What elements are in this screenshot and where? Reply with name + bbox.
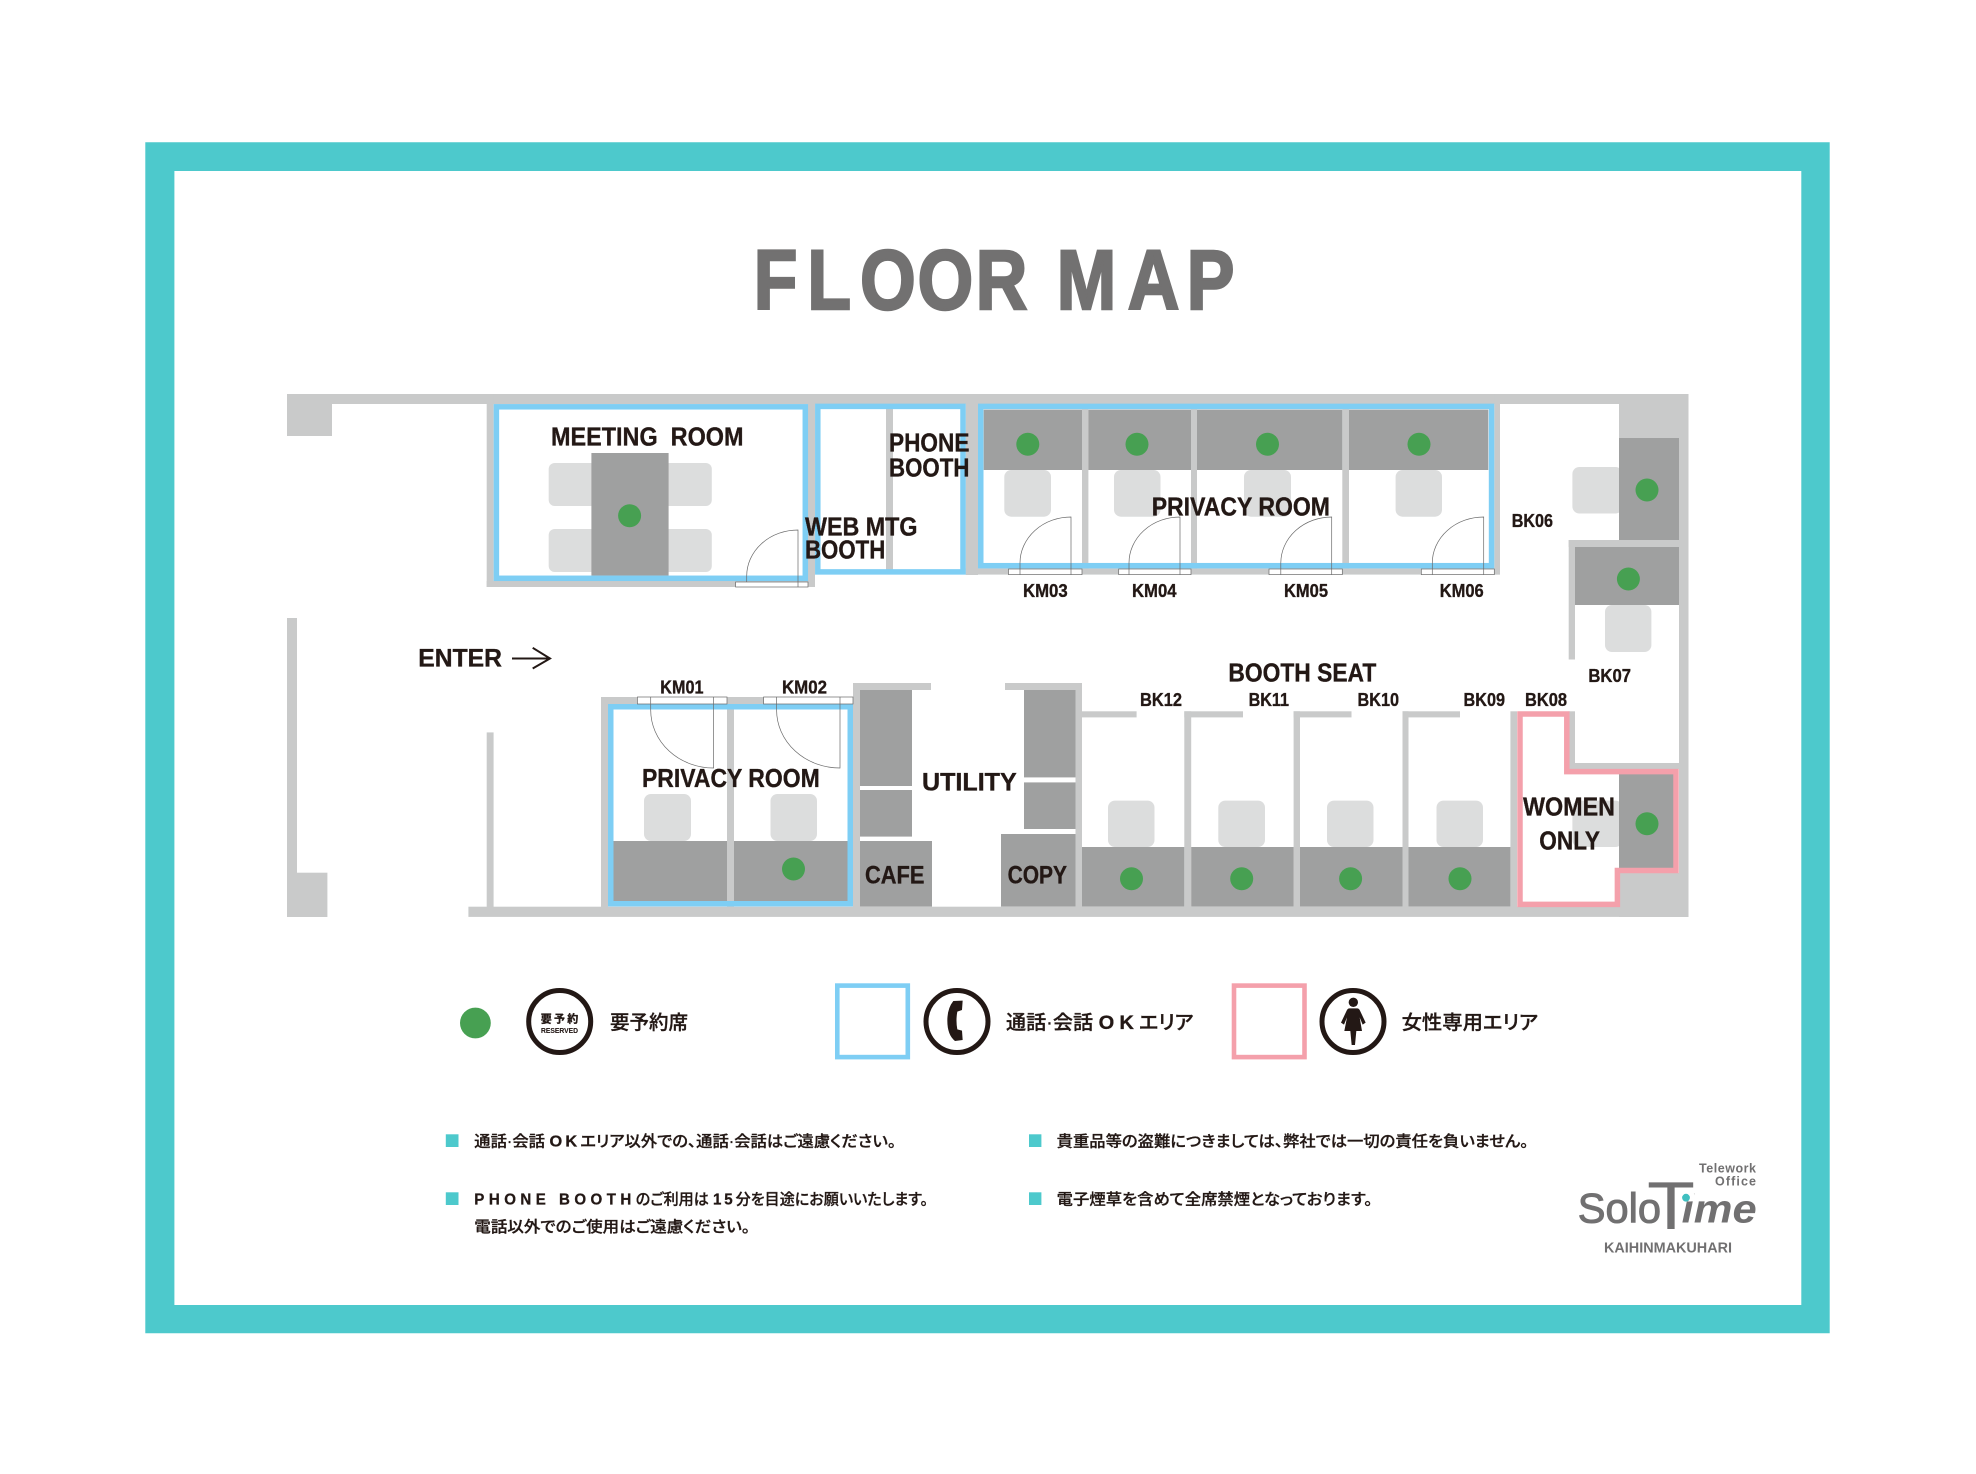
booth seat heading: BOOTH SEAT	[1228, 658, 1376, 688]
reserved dots	[1016, 433, 1430, 456]
seat numbers KM01 and KM02: KM02	[782, 676, 827, 698]
reserved dot	[1636, 812, 1658, 835]
entrance label with arrow: ENTER	[418, 645, 502, 673]
seat numbers BK09 to BK12: BK10	[1358, 689, 1399, 710]
chairs	[644, 794, 817, 841]
floor plan	[287, 394, 1688, 917]
seat numbers KM01 and KM02: KM01	[660, 676, 704, 698]
seat numbers BK09 to BK12: BK09	[1464, 689, 1505, 710]
cafe counter	[860, 841, 932, 907]
seat numbers KM03 to KM06: KM03	[1023, 580, 1068, 601]
copy counter: COPY	[1008, 861, 1067, 889]
legend text: call area: 通話·会話 OKエリア	[1006, 1012, 1194, 1034]
seat number BK08: BK08	[1525, 689, 1567, 710]
legend text: women only area: 女性専用エリア	[1402, 1012, 1538, 1034]
panel: booth seats	[1082, 658, 1510, 907]
meeting room chairs	[549, 463, 712, 572]
logo: Solo	[1578, 1185, 1661, 1232]
chairs	[1004, 470, 1442, 517]
icon: reserved badge: RESERVED	[541, 1028, 578, 1035]
panel: BK06 seat: BK06	[1512, 510, 1553, 531]
seat numbers KM01 and KM02	[660, 676, 827, 698]
legend swatch: call area	[837, 986, 908, 1057]
doors	[1008, 517, 1494, 575]
icon: reserved badge	[529, 990, 591, 1052]
logo: KAIHINMAKUHARI	[1604, 1241, 1732, 1257]
meeting room area outline	[496, 407, 805, 578]
web meeting booth label: WEB MTG	[805, 511, 918, 541]
desks	[984, 410, 1488, 470]
note: phone booth: PHONE BOOTHのご利用は 15分を目途にお願いいたします。	[474, 1190, 928, 1208]
logo: T	[1647, 1168, 1695, 1244]
women only label: WOMEN	[1523, 792, 1615, 822]
utility label: UTILITY	[922, 769, 1017, 797]
booth divider	[886, 404, 893, 570]
desks	[614, 841, 848, 901]
phone booth label: PHONE	[889, 427, 969, 457]
doors	[637, 697, 853, 768]
lower privacy room label: PRIVACY ROOM	[642, 763, 820, 793]
icon: reserved badge: 要予約	[541, 1012, 578, 1026]
desks	[1082, 847, 1510, 907]
note: phone booth: 電話以外でのご使用はご遠慮ください。	[474, 1218, 750, 1236]
logo	[1578, 1162, 1757, 1257]
meeting room door	[736, 530, 808, 587]
logo: ime	[1682, 1188, 1757, 1232]
lower privacy area outline	[611, 707, 850, 904]
phone booth label	[889, 427, 969, 482]
seat numbers BK09 to BK12	[1140, 689, 1505, 710]
seat numbers BK09 to BK12: BK11	[1249, 689, 1289, 710]
note: calls: 通話·会話 OKエリア以外での、通話·会話はご遠慮ください。	[474, 1132, 896, 1150]
women only label: ONLY	[1539, 826, 1600, 856]
women only label	[1523, 792, 1615, 856]
note: smoking: 電子煙草を含めて全席禁煙となっております。	[1057, 1190, 1372, 1208]
chairs	[1108, 801, 1483, 847]
seat numbers KM03 to KM06: KM04	[1132, 580, 1177, 601]
panel: lower privacy rooms	[611, 676, 853, 907]
title: FLOOR MAP	[754, 232, 1234, 327]
panel: BK07 seat: BK07	[1588, 665, 1631, 686]
reserved dot	[618, 504, 641, 527]
phone booth label: BOOTH	[889, 452, 969, 482]
logo: Telework	[1699, 1162, 1756, 1176]
web meeting booth label	[805, 511, 918, 564]
reserved dot	[782, 858, 805, 880]
meeting table	[591, 453, 669, 576]
panel: phone and web meeting booths	[805, 404, 969, 572]
building walls	[287, 394, 1688, 917]
icon: woman	[1322, 990, 1384, 1052]
entrance label with arrow	[418, 645, 550, 673]
copy counter	[1001, 834, 1076, 907]
legend text: reserved seats: 要予約席	[610, 1012, 688, 1034]
seat numbers KM03 to KM06: KM06	[1440, 580, 1484, 601]
seat numbers KM03 to KM06	[1023, 580, 1484, 601]
panel: women only area	[1520, 689, 1676, 904]
note: phone booth	[446, 1190, 928, 1236]
logo: Office	[1715, 1174, 1756, 1188]
chair	[1572, 801, 1622, 847]
upper privacy area outline	[981, 406, 1492, 566]
seat numbers KM03 to KM06: KM05	[1284, 580, 1328, 601]
icon: telephone	[926, 990, 988, 1052]
note: valuables: 貴重品等の盗難につきましては、弊社では一切の責任を負いません。	[1057, 1132, 1528, 1150]
upper privacy room label: PRIVACY ROOM	[1152, 492, 1330, 522]
meeting room label: MEETING ROOM	[551, 421, 744, 451]
notes	[446, 1132, 1528, 1236]
room divider	[727, 704, 734, 907]
women only area outline	[1520, 714, 1676, 904]
panel: upper privacy rooms	[981, 404, 1494, 601]
panel: BK06 seat	[1512, 438, 1679, 540]
panel: BK07 seat	[1575, 547, 1679, 686]
booth area outline	[818, 406, 963, 572]
teal frame	[145, 142, 1830, 1333]
panel: utility area	[860, 690, 1076, 907]
reserved dots	[1120, 867, 1472, 890]
web meeting booth label: BOOTH	[805, 534, 885, 564]
room dividers	[1082, 404, 1349, 570]
cabinets	[860, 690, 1076, 837]
panel: meeting room	[496, 407, 808, 587]
seat numbers BK09 to BK12: BK12	[1140, 689, 1182, 710]
legend swatch: women only area	[1234, 986, 1304, 1057]
legend	[460, 986, 1538, 1057]
legend: green dot	[460, 1008, 491, 1038]
desk	[1619, 773, 1676, 868]
cafe counter: CAFE	[865, 861, 924, 889]
